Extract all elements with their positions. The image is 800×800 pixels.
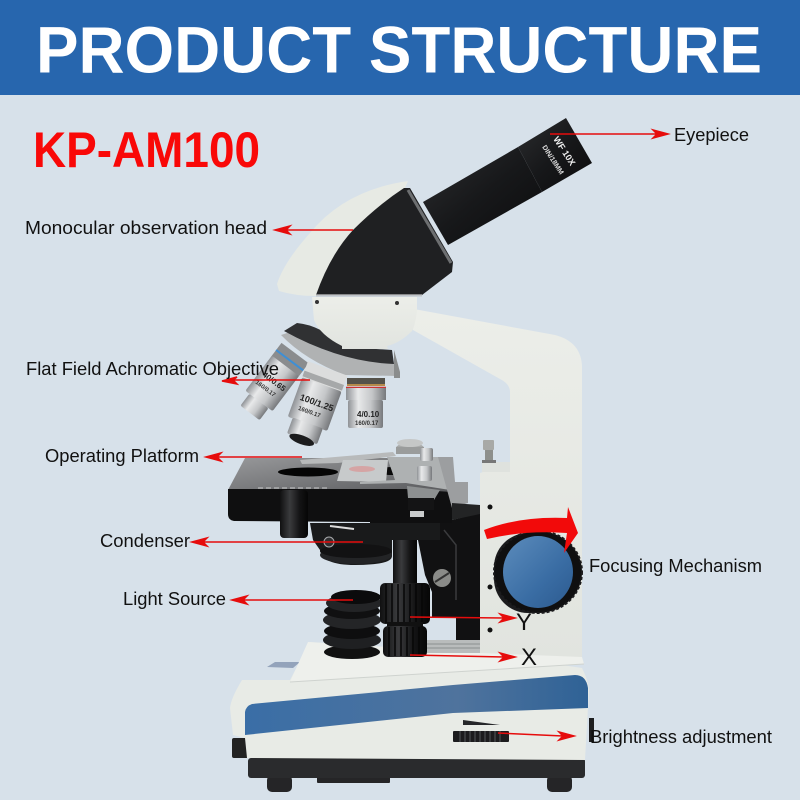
Y knob	[380, 583, 430, 624]
nosepiece	[281, 323, 400, 378]
stage clip knob	[396, 443, 424, 453]
label: Eyepiece	[550, 125, 749, 145]
observation head prism	[316, 188, 453, 295]
observation head shell	[277, 181, 408, 296]
arrow: Light Source	[232, 596, 353, 604]
objective 4x: 4/0.10	[357, 410, 380, 419]
header banner	[0, 0, 800, 95]
base feet	[267, 775, 572, 792]
stage	[228, 439, 480, 538]
label: Condenser	[100, 531, 363, 551]
stage front	[228, 489, 452, 523]
eyepiece: WF 10X	[551, 135, 577, 167]
label: Condenser: Condenser	[100, 531, 190, 551]
eyepiece	[518, 118, 592, 192]
model name: KP-AM100	[33, 122, 260, 178]
base black bottom	[248, 758, 585, 778]
left base bump	[232, 738, 252, 758]
arrow: Monocular observation head	[275, 226, 353, 234]
arrow: Condenser	[192, 538, 363, 546]
X knob	[383, 626, 427, 657]
arrow: Operating Platform	[206, 453, 302, 461]
label: Flat Field Achromatic Objective: Flat Field Achromatic Objective	[26, 359, 279, 379]
clip screw front	[417, 466, 432, 481]
stage aperture	[278, 468, 338, 476]
mechanical stage plate	[360, 457, 450, 490]
base blue band	[245, 675, 588, 735]
eyepiece tube	[423, 147, 542, 245]
label: Brightness adjustment	[498, 727, 772, 747]
arrow: Eyepiece	[550, 130, 668, 138]
label: Eyepiece: Eyepiece	[674, 125, 749, 145]
observation head collar	[312, 297, 417, 349]
objective 4x: 160/0.17	[355, 421, 379, 427]
objective 40x: 160/0.17	[254, 380, 277, 399]
label: Operating Platform	[45, 446, 302, 466]
label: Focusing Mechanism: Focusing Mechanism	[589, 556, 762, 576]
slide	[337, 460, 388, 482]
focus knob	[494, 531, 582, 613]
stage right rail	[438, 457, 468, 508]
label: Y: Y	[516, 609, 532, 636]
title: PRODUCT STRUCTURE	[36, 12, 762, 86]
condenser	[310, 523, 440, 565]
label: Flat Field Achromatic Objective	[26, 359, 310, 384]
label: Light Source: Light Source	[123, 589, 226, 609]
specimen holder arm	[300, 452, 396, 464]
label: Monocular observation head: Monocular observation head	[25, 218, 267, 238]
arrow: X	[410, 653, 515, 661]
lamp collector	[323, 590, 382, 659]
microscope arm and pillar	[403, 307, 582, 658]
microscope illustration	[228, 118, 594, 792]
focus direction arrow	[484, 507, 578, 553]
clip screw rear	[420, 448, 433, 461]
rear gray tab	[267, 662, 300, 668]
brightness wheel	[453, 720, 509, 742]
objective 100x	[280, 361, 347, 451]
stage pillar block	[280, 490, 308, 538]
objective 4x	[346, 378, 386, 428]
label: X: X	[521, 644, 537, 671]
label: Operating Platform: Operating Platform	[45, 446, 199, 466]
label: Brightness adjustment: Brightness adjustment	[590, 727, 772, 747]
arrow: Y	[410, 614, 515, 622]
bracket thumbscrew	[433, 569, 451, 587]
objective 40x: 40/0.65	[261, 370, 288, 394]
pillar top screw	[482, 440, 510, 472]
objective 100x: 100/1.25	[299, 392, 335, 413]
arrow: Brightness adjustment	[498, 732, 574, 740]
label: X	[410, 644, 537, 671]
pillar screws	[488, 504, 492, 632]
base raised platform	[290, 642, 584, 682]
stage top surface	[228, 458, 452, 495]
rear rack bracket	[418, 513, 480, 653]
rear switch	[589, 718, 594, 742]
label: Monocular observation head	[25, 218, 353, 238]
objective 100x: 160/0.17	[297, 406, 322, 420]
base body	[230, 642, 589, 760]
label: Light Source	[123, 589, 353, 609]
label: Y	[410, 609, 532, 636]
coaxial stage knobs	[380, 540, 430, 657]
eyepiece: DIN/18MM	[540, 144, 565, 176]
objective 40x	[236, 343, 309, 423]
